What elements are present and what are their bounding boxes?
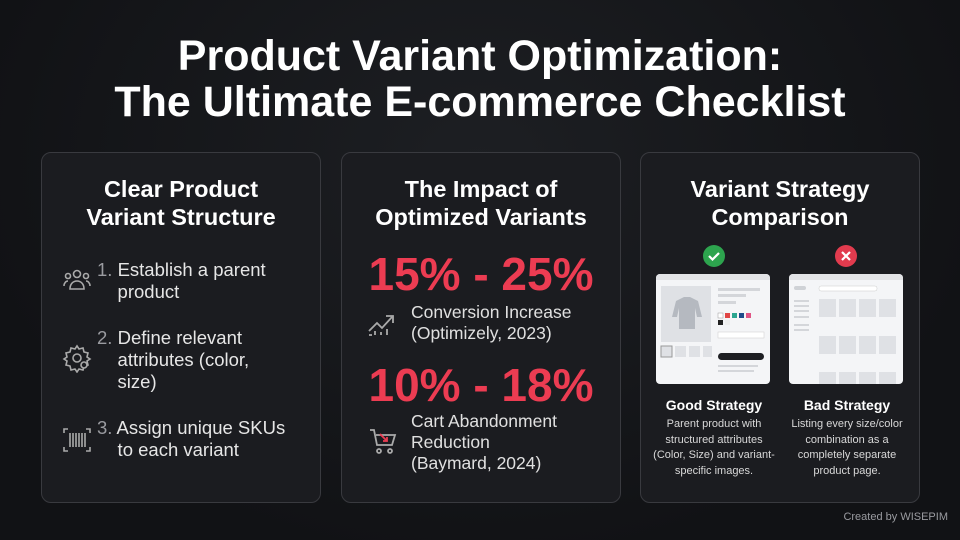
icon: cross [835,245,857,267]
heading: impact: Optimized Variants [375,204,587,230]
item 1: 1. Establish a parent [97,259,266,280]
label: bad: Bad Strategy [804,397,890,413]
item 2: attributes (color, [118,349,249,370]
heading: comparison: Comparison [711,204,849,230]
item 3 [97,417,285,460]
stat 2: 10% - 18% [368,359,594,411]
heading: structure [86,176,276,230]
heading: comparison [690,176,870,230]
icon: people [63,270,91,290]
item 3: 3. Assign unique SKUs [97,417,285,438]
heading: impact [375,176,587,230]
stat 2 text: Reduction [411,432,490,452]
item 2: size) [118,371,157,392]
panel: comparison [640,152,920,503]
title: Product Variant Optimization: [178,32,782,80]
desc: good: Parent product with structured attributes (Color, Size) and variant-specific images. [653,418,775,476]
icon: gear [62,344,92,373]
icon: check [703,245,725,267]
stat 1: 15% - 25% [368,248,594,300]
panel: impact [341,152,621,503]
item 3: to each variant [118,439,239,460]
heading: comparison: Variant Strategy [691,176,869,202]
footer credit: Created by WISEPIM [843,511,948,523]
icon: cart [370,429,396,454]
stat 2 text: (Baymard, 2024) [411,453,541,473]
label: good: Good Strategy [666,397,762,413]
icon: barcode [63,428,91,452]
stat 1 text: (Optimizely, 2023) [411,323,552,343]
title [114,32,846,126]
item 1 [97,259,266,302]
item 2: 2. Define relevant [97,327,242,348]
mockup: good [656,274,770,384]
item 1: product [118,281,179,302]
desc: bad: Listing every size/color combination as a completely separate product page. [791,418,903,476]
heading: structure: Clear Product [104,176,258,202]
stat 1 text: Conversion Increase [411,302,572,322]
heading: impact: The Impact of [405,176,557,202]
title: The Ultimate E-commerce Checklist [114,78,846,126]
panel: structure [41,152,321,503]
stat 1 text [411,302,572,343]
item 2 [97,327,249,392]
stat 2 text: Cart Abandonment [411,411,557,431]
stat 2 text [411,411,557,473]
heading: structure: Variant Structure [86,204,276,230]
mockup: bad [789,274,903,384]
icon: chart up [368,315,394,336]
